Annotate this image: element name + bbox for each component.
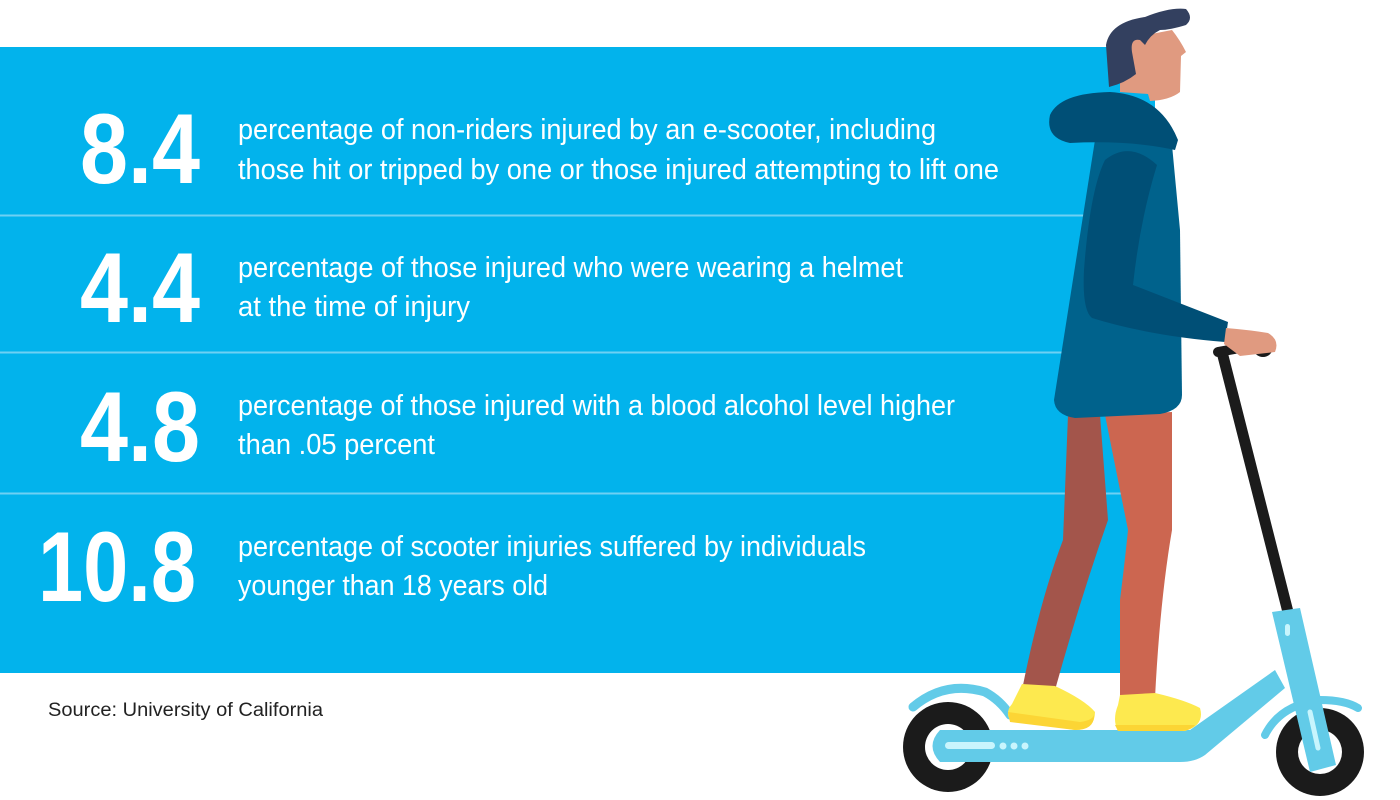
hand bbox=[1224, 328, 1276, 356]
stat row 3: 4.8 bbox=[80, 371, 200, 482]
arm bbox=[1084, 151, 1228, 342]
source note: Source: University of California bbox=[48, 700, 323, 721]
stat row 4: 10.8 bbox=[38, 511, 196, 622]
face bbox=[1120, 30, 1186, 101]
stat row 4 bbox=[38, 511, 866, 622]
stat row 1: 8.4 bbox=[80, 93, 200, 204]
stat row 3: percentage of those injured with a blood alcohol level higher bbox=[238, 390, 955, 422]
deck bbox=[932, 670, 1285, 762]
shoes bbox=[1008, 684, 1095, 730]
fork bbox=[1272, 608, 1336, 772]
wheels bbox=[903, 702, 993, 792]
illustration: person on scooter bbox=[903, 9, 1364, 796]
stat row 2 bbox=[80, 232, 903, 343]
coat bbox=[1054, 140, 1182, 418]
stat row 4: younger than 18 years old bbox=[238, 570, 548, 602]
stat row 1 bbox=[80, 93, 999, 204]
hair bbox=[1106, 9, 1190, 87]
stat row 3 bbox=[80, 371, 955, 482]
stat row 2: at the time of injury bbox=[238, 291, 470, 323]
legs bbox=[1022, 415, 1108, 690]
stat row 3: than .05 percent bbox=[238, 429, 435, 461]
stat row 4: percentage of scooter injuries suffered by individuals bbox=[238, 531, 866, 563]
fenders bbox=[913, 688, 1010, 715]
stat row 1: percentage of non-riders injured by an e-scooter, including bbox=[238, 114, 936, 146]
stat row 1: those hit or tripped by one or those injured attempting to lift one bbox=[238, 154, 999, 186]
hood collar bbox=[1049, 92, 1178, 150]
scooter stem bbox=[1222, 352, 1290, 620]
stat row 2: percentage of those injured who were wearing a helmet bbox=[238, 252, 903, 284]
panel: blue stats background bbox=[0, 47, 1155, 673]
stat row 2: 4.4 bbox=[80, 232, 200, 343]
